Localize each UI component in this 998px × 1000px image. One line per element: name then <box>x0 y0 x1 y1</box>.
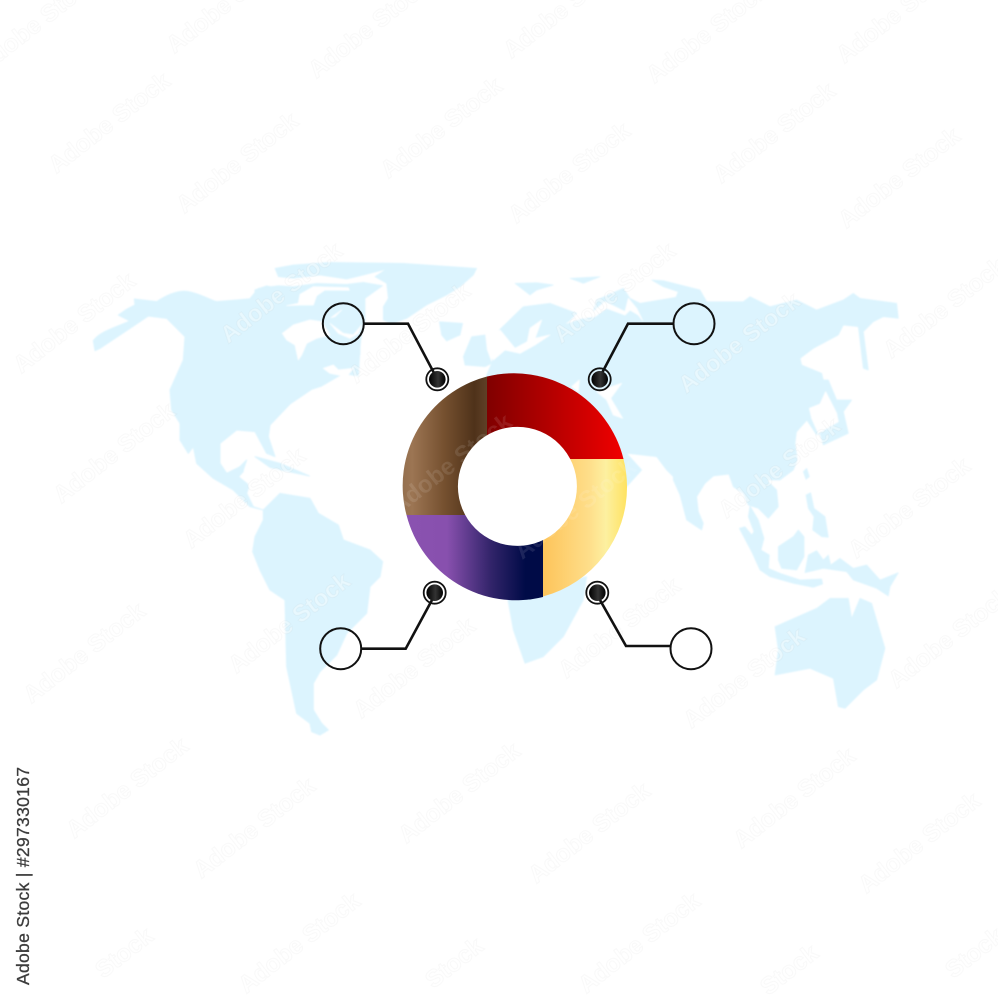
watermark pattern: Adobe Stock <box>18 597 151 709</box>
segment: yellow <box>543 459 627 596</box>
watermark pattern: Adobe Stock <box>375 72 508 184</box>
watermark pattern: Adobe Stock <box>553 572 686 684</box>
watermark pattern: Adobe Stock <box>233 887 366 999</box>
watermark pattern: Adobe Stock <box>843 452 976 564</box>
watermark pattern: Adobe Stock <box>853 787 986 899</box>
faint watermark over donut: Adobe Stock <box>509 453 642 565</box>
watermark pattern: Adobe Stock <box>48 397 181 509</box>
watermark pattern: Adobe Stock <box>678 622 811 734</box>
callout: bottom right <box>586 582 712 669</box>
callout: bottom left <box>320 582 446 669</box>
stock id label: Adobe Stock | #297330167 <box>13 767 33 985</box>
watermark pattern: Adobe Stock <box>188 772 321 884</box>
watermark pattern: Adobe Stock <box>215 237 348 349</box>
map: the Americas <box>93 286 383 735</box>
watermark pattern: Adobe Stock <box>223 567 356 679</box>
segment: purple <box>406 515 543 600</box>
watermark pattern: Adobe Stock <box>343 277 476 389</box>
watermark pattern: Adobe Stock <box>833 122 966 234</box>
segment: brown <box>403 376 487 515</box>
watermark pattern: Stock <box>420 932 489 994</box>
segment: red <box>487 373 624 459</box>
faint watermark over donut: Adobe Stock <box>385 408 518 520</box>
watermark pattern: Adobe Stock <box>728 742 861 854</box>
watermark pattern: Adobe Stock <box>523 777 656 889</box>
watermark pattern: Adobe Stock <box>708 77 841 189</box>
watermark pattern: Adobe Stock <box>713 412 846 524</box>
watermark pattern: Stock <box>755 939 824 1000</box>
callout: top right <box>589 303 714 390</box>
watermark pattern: Adobe Stock <box>673 287 806 399</box>
watermark pattern: Adobe Stock <box>171 107 304 219</box>
watermark pattern: Adobe Stock <box>61 732 194 844</box>
world map <box>93 262 898 735</box>
watermark pattern: Stock <box>90 922 159 984</box>
watermark pattern: Adobe Stock <box>348 612 481 724</box>
map: East and South-East Asia <box>673 380 898 596</box>
watermark pattern: Adobe Stock <box>43 67 176 179</box>
map: Eurasia, Africa and Australia <box>448 277 898 708</box>
watermark pattern: Adobe Stock <box>8 267 141 379</box>
donut chart <box>403 373 627 600</box>
watermark pattern: Adobe Stock <box>573 887 706 999</box>
watermark pattern: Adobe Stock <box>503 117 636 229</box>
faint watermark over donut <box>385 408 642 565</box>
watermark pattern: Adobe Stock <box>178 442 311 554</box>
donut hole <box>458 427 577 546</box>
watermark pattern: Adobe Stock <box>548 237 681 349</box>
callout: top left <box>323 303 448 390</box>
watermark pattern: Adobe Stock <box>393 737 526 849</box>
map: Arctic Canada, Greenland and Iceland <box>250 262 477 377</box>
